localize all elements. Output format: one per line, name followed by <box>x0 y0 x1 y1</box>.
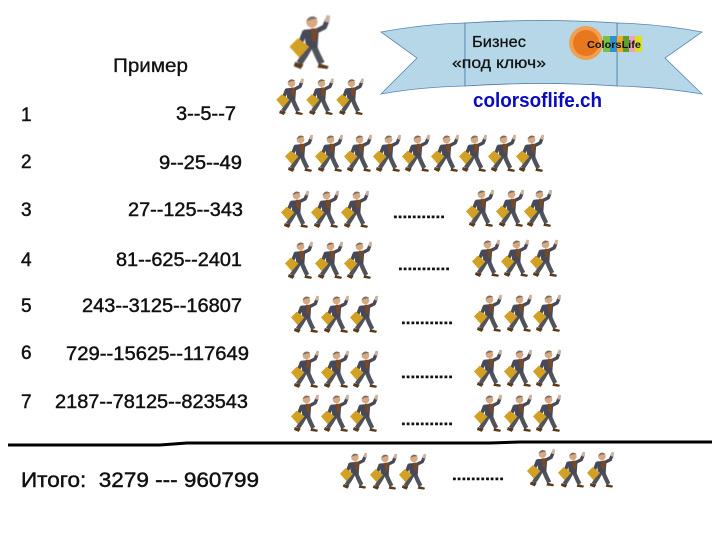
row 7 icons <box>291 395 561 432</box>
row 5 icons <box>291 295 561 333</box>
table: row numbers and series: 243--3125--16807 <box>82 296 242 317</box>
ellipsis dots: ........... <box>398 257 450 274</box>
icon: large walking businessman <box>290 15 330 69</box>
logo: Colors of Life <box>569 26 642 60</box>
table: row numbers and series: 2187--78125--823543 <box>55 392 248 413</box>
banner text second line: «под ключ» <box>452 55 546 72</box>
total divider line <box>8 442 712 445</box>
banner ribbon <box>381 20 702 94</box>
logo: Colors of Life: ColorsLife <box>587 40 641 51</box>
total row icons <box>340 449 614 490</box>
table: row numbers and series <box>21 104 249 413</box>
ellipsis dots: ........... <box>393 205 445 222</box>
link: colorsoflife.ch: colorsoflife.ch <box>473 90 602 112</box>
ellipsis dots: ........... <box>452 467 504 484</box>
table: row numbers and series: 27--125--343 <box>128 200 243 221</box>
table: row numbers and series: 81--625--2401 <box>116 250 242 271</box>
row 1 icons <box>276 78 364 115</box>
row 4 icons <box>285 240 558 279</box>
table: row numbers and series: 5 <box>21 296 32 317</box>
row 2 icons <box>285 135 544 172</box>
banner text: Бизнес <box>472 34 526 51</box>
heading: Пример: Пример <box>113 56 188 77</box>
table: row numbers and series: 7 <box>21 392 32 413</box>
table: row numbers and series: 3 <box>21 200 32 221</box>
table: row numbers and series: 3--5--7 <box>176 104 236 125</box>
table: row numbers and series: 729--15625--117649 <box>66 344 249 365</box>
total text: Итого: 3279 --- 960799 <box>21 469 259 492</box>
table: row numbers and series: 6 <box>21 343 32 364</box>
row 3 icons <box>281 190 552 228</box>
table: row numbers and series: 1 <box>21 105 32 126</box>
ellipsis dots: ........... <box>401 365 453 382</box>
row 6 icons <box>291 350 561 388</box>
ellipsis dots: ........... <box>401 311 453 328</box>
ellipsis dots <box>393 205 504 484</box>
ellipsis dots: ........... <box>401 412 453 429</box>
table: row numbers and series: 2 <box>21 152 32 173</box>
table: row numbers and series: 4 <box>21 250 32 271</box>
table: row numbers and series: 9--25--49 <box>159 153 242 174</box>
